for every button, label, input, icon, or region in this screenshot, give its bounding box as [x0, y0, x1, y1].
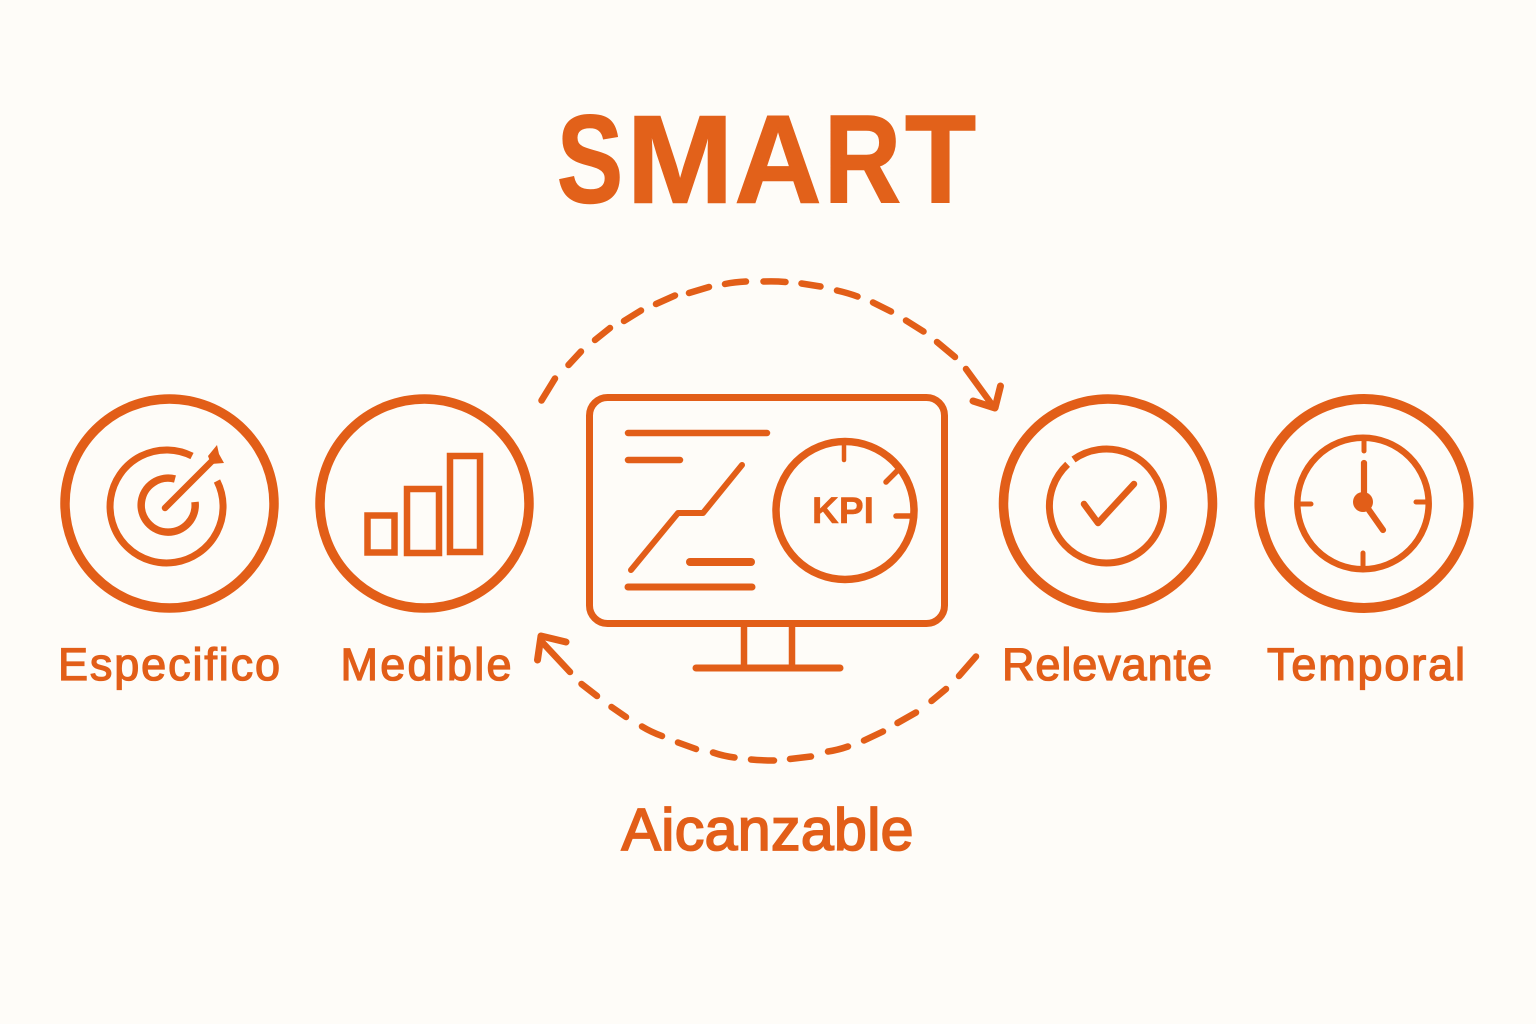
label: Aicanzable: Aicanzable: [622, 797, 914, 863]
icon: bar chart (Medible): [320, 399, 529, 608]
title: M: [626, 90, 734, 230]
title: [557, 90, 976, 230]
KPI label: KPI: [812, 489, 874, 531]
label: Medible: Medible: [340, 639, 512, 690]
arrow: bottom dashed arc: [538, 636, 976, 760]
title: A: [734, 90, 822, 230]
icon: clock (Temporal): [1260, 399, 1468, 608]
label: Especifico: Especifico: [58, 639, 280, 690]
label: Temporal: Temporal: [1267, 639, 1465, 690]
icon: check (Relevante): [1004, 399, 1212, 608]
title: S: [557, 90, 623, 230]
title: R: [824, 90, 901, 230]
label: Relevante: Relevante: [1002, 639, 1212, 690]
title: T: [905, 90, 976, 230]
arrow: top dashed arc: [542, 281, 1000, 408]
icon: monitor dashboard with KPI: [590, 398, 944, 668]
icon: target (Especifico): [65, 399, 274, 608]
